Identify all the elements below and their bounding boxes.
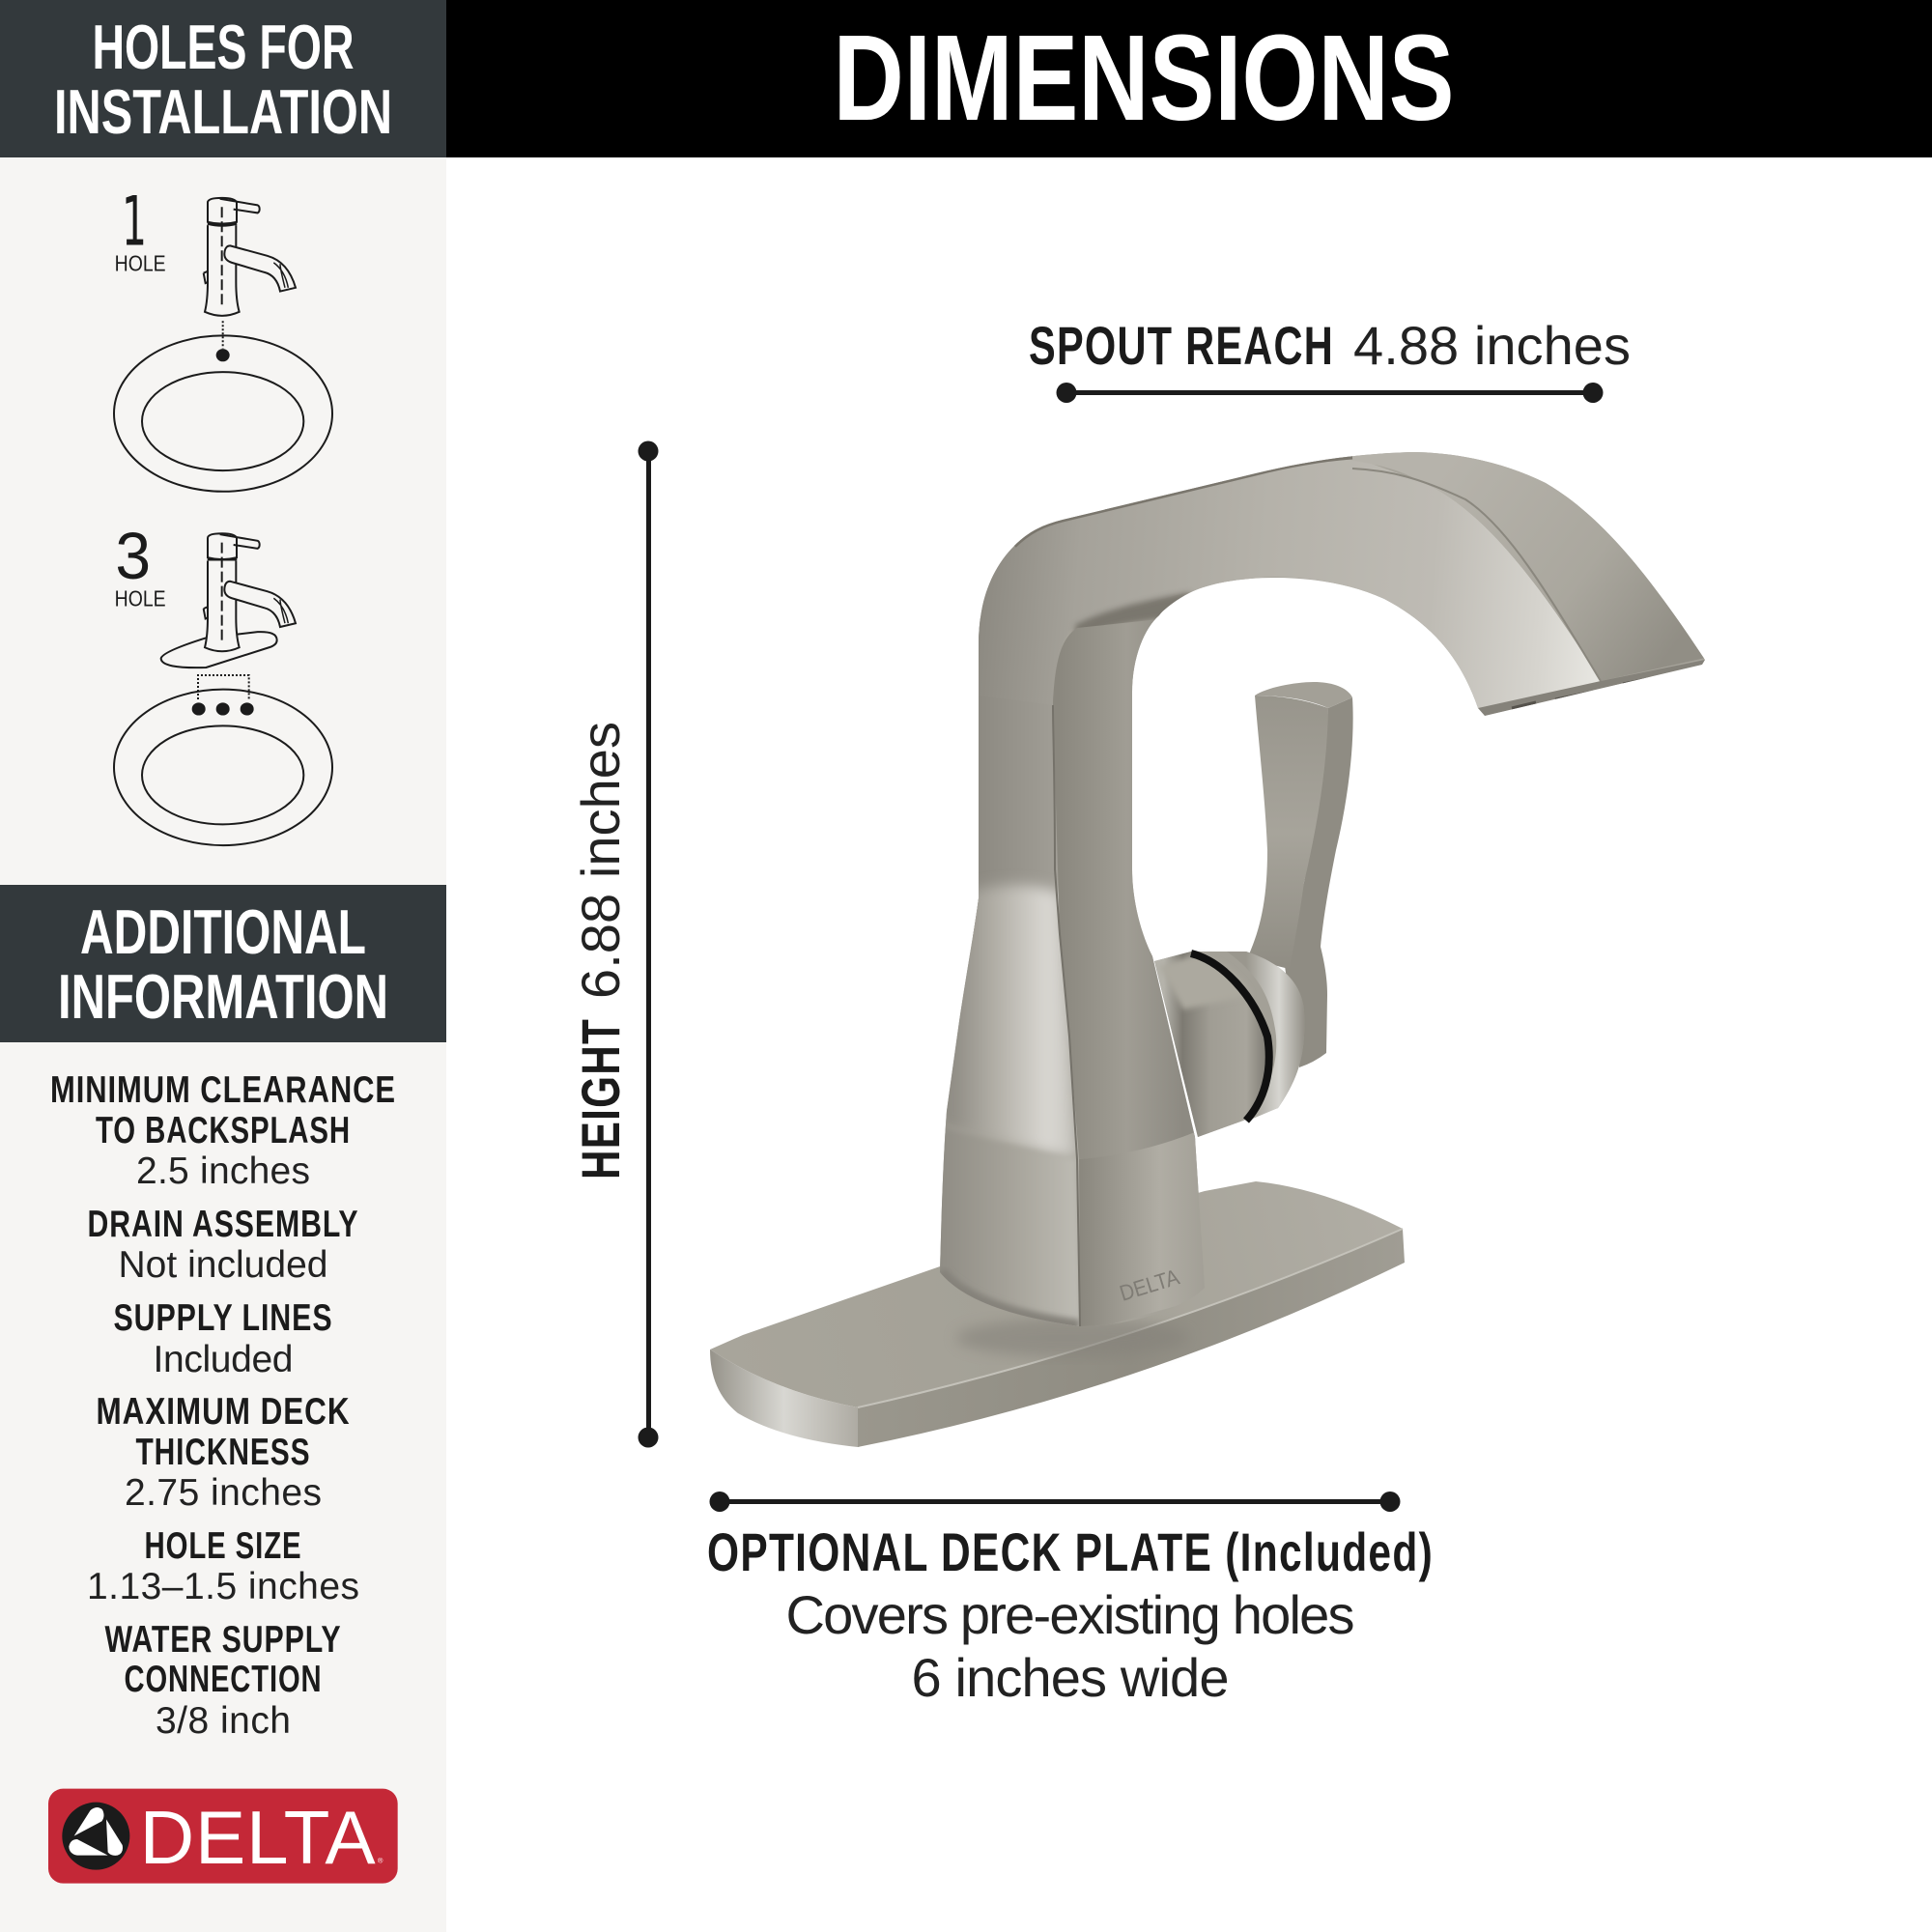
product photo: faucet on deck plate [710, 444, 1719, 1447]
info: minimum clearance: TO BACKSPLASH [96, 1110, 351, 1151]
info: minimum clearance [50, 1069, 396, 1192]
diagram: one hole installation: 1 [122, 183, 147, 262]
info: supply lines: SUPPLY LINES [114, 1297, 332, 1339]
spout reach label: 4.88 inches [1353, 315, 1631, 376]
spout reach label: SPOUT REACH [1029, 315, 1334, 376]
arrow: height dimension line [638, 440, 659, 1447]
arrow: deck plate dimension line [709, 1492, 1401, 1512]
Delta logo badge [48, 1789, 398, 1884]
header: holes for installation [0, 0, 446, 157]
deck plate [710, 1181, 1405, 1447]
faucet handle [1249, 682, 1353, 1067]
info: maximum deck thickness: THICKNESS [135, 1432, 311, 1473]
info: supply lines: Included [153, 1339, 294, 1380]
header: additional information [0, 885, 446, 1042]
header: additional information: ADDITIONAL [80, 896, 366, 967]
info: maximum deck thickness: 2.75 inches [125, 1472, 322, 1514]
info: minimum clearance: MINIMUM CLEARANCE [50, 1069, 396, 1111]
header: holes for installation: INSTALLATION [54, 76, 392, 147]
diagram: three hole installation [114, 519, 332, 845]
left sidebar background [0, 0, 446, 1932]
info: maximum deck thickness: MAXIMUM DECK [97, 1391, 350, 1433]
title banner: dimensions [446, 0, 1932, 157]
info: drain assembly [87, 1204, 359, 1286]
info: hole size [87, 1525, 359, 1607]
faucet body and spout [923, 444, 1719, 1338]
info: drain assembly: DRAIN ASSEMBLY [87, 1204, 359, 1245]
info: maximum deck thickness [97, 1391, 350, 1514]
Delta logo badge: ® [378, 1857, 384, 1865]
height label: 6.88 inches [570, 722, 631, 999]
spout reach label [1029, 315, 1631, 376]
arrow: spout reach dimension line [1057, 383, 1604, 403]
info: minimum clearance: 2.5 inches [136, 1151, 310, 1192]
faucet body and spout: DELTA [1117, 1264, 1182, 1306]
icon: delta triangle emblem [62, 1803, 129, 1870]
info: hole size: HOLE SIZE [145, 1525, 301, 1567]
info: water supply connection: WATER SUPPLY [104, 1619, 342, 1661]
info: supply lines [114, 1297, 332, 1380]
diagram: one hole installation: HOLE [115, 252, 166, 276]
deck plate label: 6 inches wide [912, 1647, 1229, 1708]
info: hole size: 1.13–1.5 inches [87, 1566, 359, 1607]
diagram: one hole installation [114, 183, 332, 492]
header: additional information: INFORMATION [58, 961, 388, 1032]
header: holes for installation: HOLES FOR [93, 12, 354, 82]
title banner: dimensions: DIMENSIONS [833, 10, 1455, 146]
Delta logo badge: DELTA [140, 1795, 376, 1880]
height label: HEIGHT [570, 1018, 631, 1179]
deck plate label [707, 1521, 1434, 1708]
diagram: three hole installation: HOLE [115, 587, 166, 611]
deck plate label: OPTIONAL DECK PLATE (Included) [707, 1521, 1434, 1582]
faucet handle hub [1154, 952, 1304, 1137]
info: water supply connection: CONNECTION [124, 1659, 323, 1700]
deck plate label: Covers pre-existing holes [786, 1584, 1354, 1645]
info: water supply connection [104, 1619, 342, 1742]
diagram: three hole installation: 3 [115, 519, 151, 593]
info: water supply connection: 3/8 inch [156, 1700, 291, 1742]
height label [570, 722, 631, 1179]
info: drain assembly: Not included [118, 1244, 328, 1286]
additional information list [50, 1069, 396, 1742]
